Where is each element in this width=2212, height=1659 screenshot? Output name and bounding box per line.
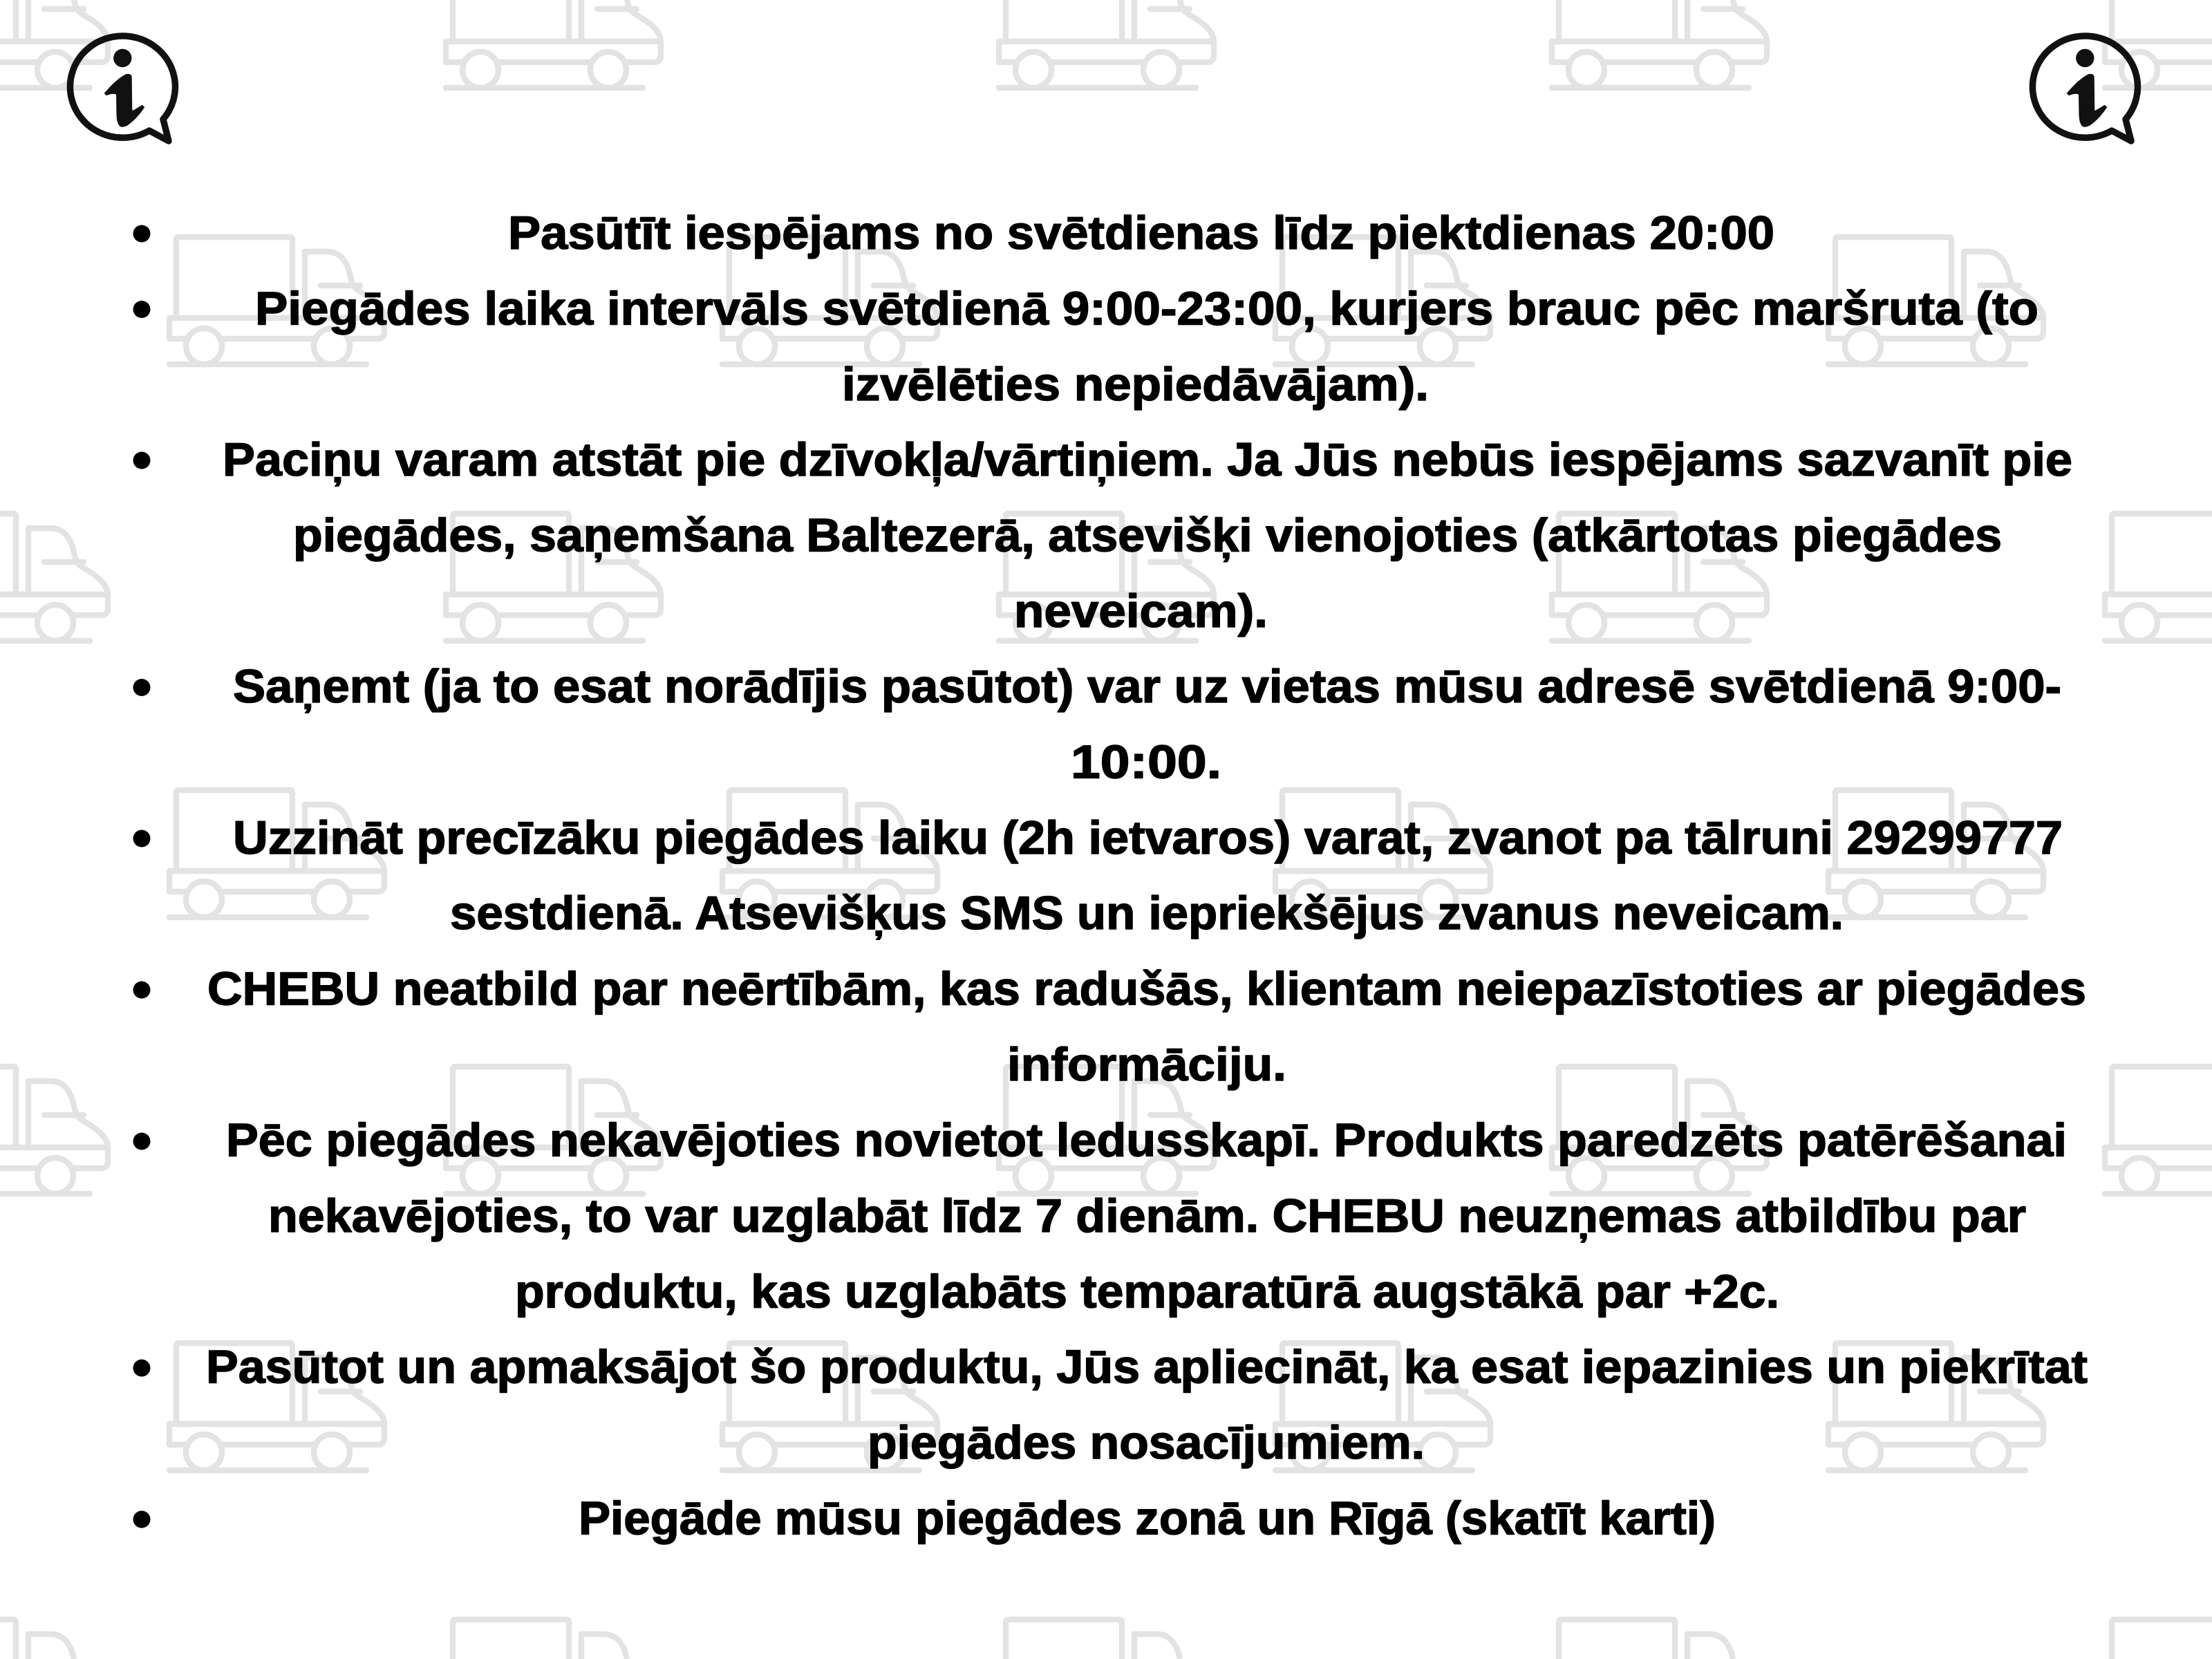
list item: storage: Pēc piegādes nekavējoties novietot ledusskapī. Produkts paredzēts patērēšanai (226, 1114, 2067, 1167)
list item: leaving the parcel: piegādes, saņemšana Baltezerā, atsevišķi vienojoties (atkārtotas piegādes (293, 510, 2002, 562)
list item: acceptance of terms: Pasūtot un apmaksājot šo produktu, Jūs apliecināt, ka esat iepazinies un piekrītat (206, 1342, 2088, 1394)
list item: phone enquiry: sestdienā. Atsevišķus SMS un iepriekšējus zvanus neveicam. (450, 888, 1844, 939)
icon: info speech bubble left (70, 36, 175, 141)
list item: pick-up (133, 661, 2061, 788)
list item: liability for inconvenience: CHEBU neatbild par neērtībām, kas radušās, klientam neiepazīstoties ar piegādes (207, 964, 2086, 1015)
list item: leaving the parcel: Paciņu varam atstāt pie dzīvokļa/vārtiņiem. Ja Jūs nebūs iespējams sazvanīt pie (223, 434, 2072, 486)
list item: acceptance of terms: piegādes nosacījumiem. (868, 1417, 1425, 1469)
list item: pick-up: Saņemt (ja to esat norādījis pasūtot) var uz vietas mūsu adresē svētdienā 9:00- (233, 661, 2061, 713)
list item: leaving the parcel: neveicam). (1014, 585, 1268, 637)
bulleted delivery information list (133, 207, 2088, 1544)
list item: phone enquiry: Uzzināt precīzāku piegādes laiku (2h ietvaros) varat, zvanot pa tālruni 29299777 (233, 812, 2063, 864)
list item: storage (133, 1114, 2067, 1318)
list item: storage: nekavējoties, to var uzglabāt līdz 7 dienām. CHEBU neuzņemas atbildību par (268, 1190, 2026, 1242)
list item: delivery interval: Piegādes laika intervāls svētdienā 9:00-23:00, kurjers brauc pēc maršruta (to (255, 283, 2038, 335)
list item: ordering time: Pasūtīt iespējams no svētdienas līdz piektdienas 20:00 (508, 207, 1774, 259)
icon: info speech bubble right (2032, 36, 2137, 141)
list item: storage: produktu, kas uzglabāts temparatūrā augstākā par +2c. (515, 1266, 1779, 1318)
list item: acceptance of terms (133, 1342, 2088, 1469)
list item: delivery interval: izvēlēties nepiedāvājam). (842, 359, 1429, 411)
list item: delivery zone: Piegāde mūsu piegādes zonā un Rīgā (skatīt karti) (579, 1493, 1716, 1544)
list item: liability for inconvenience: informāciju. (1007, 1039, 1286, 1091)
list item: delivery interval (133, 283, 2038, 411)
list item: pick-up: 10:00. (1071, 736, 1221, 788)
list item: liability for inconvenience (133, 964, 2086, 1091)
list item: leaving the parcel (133, 434, 2072, 637)
list item: phone enquiry (133, 812, 2063, 939)
